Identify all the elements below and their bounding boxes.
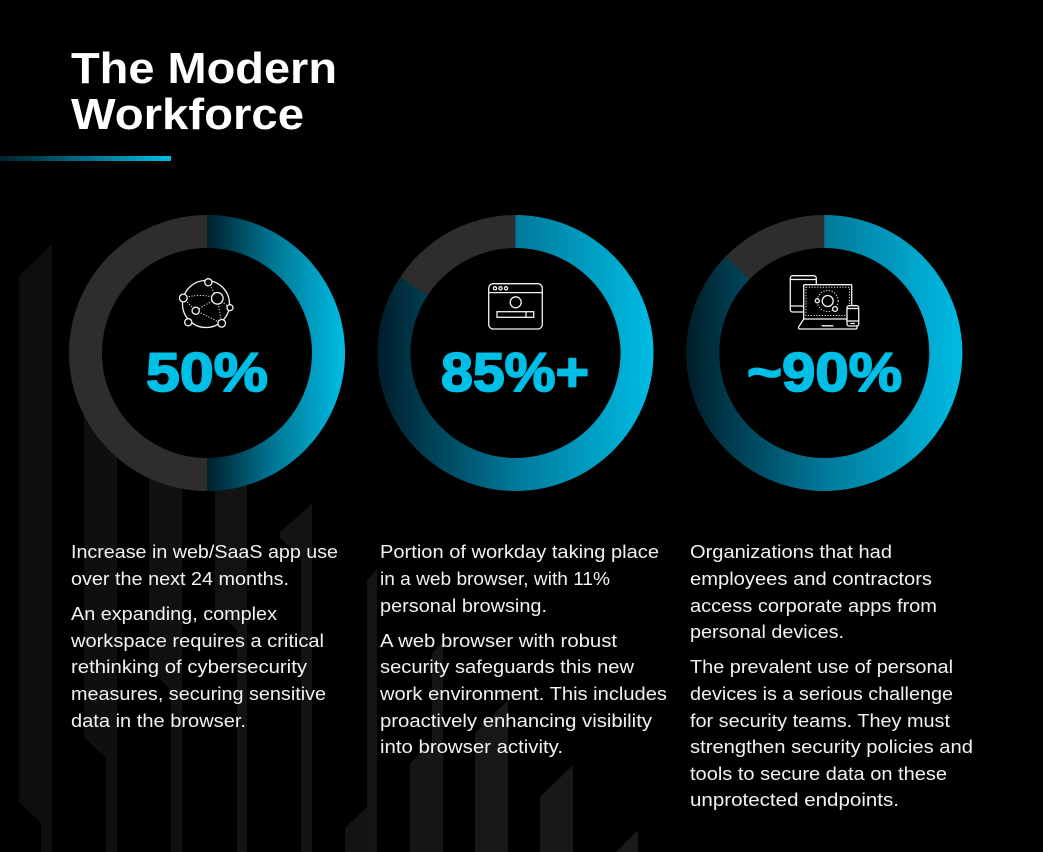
text block: 85% description: into browser activity. bbox=[380, 736, 563, 757]
icon: tablet, laptop and phone bbox=[790, 276, 859, 329]
text block: 50% description: data in the browser. bbox=[71, 710, 246, 731]
text block: 90% description: strengthen security policies and bbox=[690, 736, 973, 757]
text block: 90% description: for security teams. They must bbox=[690, 710, 950, 731]
text block: 85% description: proactively enhancing visibility bbox=[380, 710, 653, 731]
donut chart: 85% bbox=[378, 215, 654, 491]
text block: 50% description: over the next 24 months. bbox=[71, 568, 289, 589]
text block: 50% description: An expanding, complex bbox=[71, 603, 278, 624]
text block: 90% description: tools to secure data on these bbox=[690, 763, 947, 784]
text block: 50% description bbox=[70, 541, 338, 731]
title: The Modern bbox=[71, 44, 337, 93]
text block: 85% description: security safeguards this new bbox=[380, 656, 635, 677]
panel: 85%+ workday in browser bbox=[378, 215, 667, 757]
panel: ~90% personal devices bbox=[686, 215, 973, 810]
stat: 85%+: 85%+ bbox=[441, 341, 589, 403]
text block: 50% description: rethinking of cybersecurity bbox=[71, 656, 308, 677]
title: Workforce bbox=[71, 90, 304, 139]
text block: 90% description: devices is a serious challenge bbox=[690, 683, 953, 704]
text block: 50% description: workspace requires a critical bbox=[70, 630, 324, 651]
text block: 90% description bbox=[690, 541, 973, 810]
text block: 50% description: measures, securing sensitive bbox=[71, 683, 326, 704]
text block: 85% description: personal browsing. bbox=[380, 595, 547, 616]
text block: 85% description: in a web browser, with 11% bbox=[380, 568, 610, 589]
title bbox=[71, 44, 337, 139]
text block: 85% description: Portion of workday taking place bbox=[380, 541, 659, 562]
text block: 85% description bbox=[379, 541, 667, 757]
text block: 90% description: unprotected endpoints. bbox=[690, 789, 899, 810]
title underline accent bbox=[0, 156, 171, 161]
text block: 90% description: access corporate apps from bbox=[690, 595, 937, 616]
icon: network globe bbox=[179, 279, 233, 328]
text block: 90% description: Organizations that had bbox=[690, 541, 892, 562]
stat: ~90%: ~90% bbox=[747, 341, 902, 403]
text block: 90% description: personal devices. bbox=[690, 621, 844, 642]
panel: 50% web/SaaS use bbox=[69, 215, 345, 731]
donut chart: 90% bbox=[686, 215, 962, 491]
text block: 85% description: A web browser with robust bbox=[380, 630, 617, 651]
text block: 50% description: Increase in web/SaaS app use bbox=[71, 541, 338, 562]
text block: 85% description: work environment. This includes bbox=[379, 683, 667, 704]
stat: 50%: 50% bbox=[146, 341, 268, 403]
donut chart: 50% bbox=[69, 215, 345, 491]
icon: browser window bbox=[489, 284, 542, 329]
text block: 90% description: employees and contractors bbox=[690, 568, 932, 589]
text block: 90% description: The prevalent use of personal bbox=[690, 656, 953, 677]
